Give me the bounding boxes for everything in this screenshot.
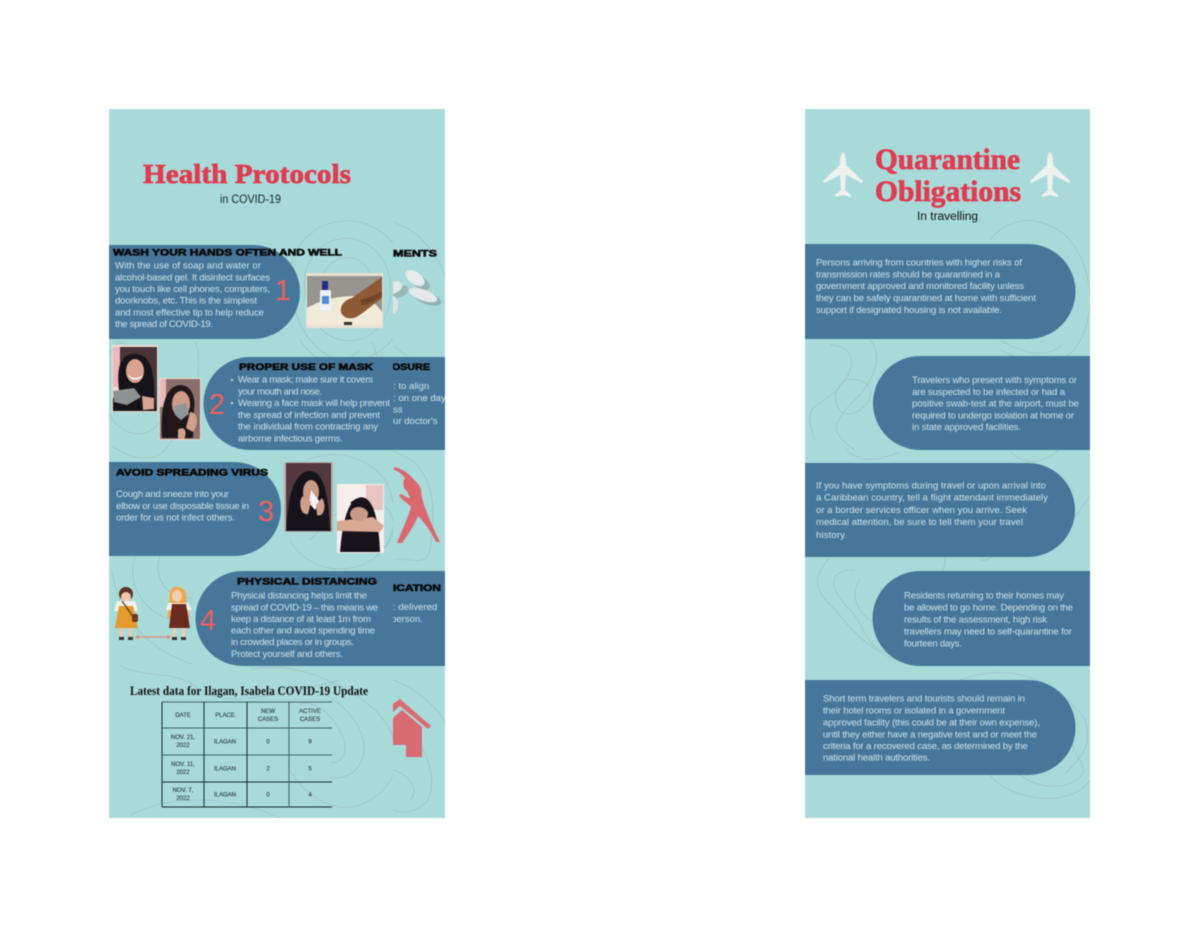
- panel: countries with higher risk: transmission rates should be quarantined in a: [816, 269, 1001, 280]
- panel: short term travelers: until they either have a negative test and or meet the: [823, 730, 1037, 740]
- panel: countries with higher risk: government approved and monitored facility unless: [816, 281, 1024, 292]
- table: COVID-19 cases: [162, 702, 332, 807]
- table: COVID-19 cases: ILAGAN: [214, 740, 236, 746]
- text: distancing body: spread of COVID-19 – this means we: [231, 602, 378, 613]
- table: COVID-19 cases: NOV. 7,: [173, 788, 194, 794]
- panel: travelers with symptoms: Travelers who present with symptoms or: [912, 375, 1078, 386]
- panel: symptoms during travel: a Caribbean country, tell a flight attendant immediately: [816, 492, 1048, 504]
- table: COVID-19 cases: 9: [308, 740, 312, 746]
- panel: symptoms during travel: history.: [816, 530, 847, 541]
- text: mask body: Wear a mask; make sure it covers: [238, 374, 373, 386]
- panel: travelers with symptoms: positive swab-test at the airport, must be: [912, 398, 1079, 410]
- heading: latest data: Latest data for Ilagan, Isabela COVID-19 Update: [130, 684, 368, 698]
- text: virus body: order for us not infect others.: [116, 512, 235, 524]
- text: exposure fragment: [393, 381, 446, 427]
- panel: residents returning: [872, 571, 1090, 666]
- photo: girl wearing mask: [159, 378, 201, 440]
- icon: house: [393, 699, 431, 757]
- subtitle: in travelling: In travelling: [917, 211, 978, 223]
- table: COVID-19 cases: CASES: [300, 717, 320, 723]
- table: COVID-19 cases: 5: [308, 766, 312, 772]
- panel: countries with higher risk: support if designated housing is not available.: [816, 305, 1002, 316]
- text: virus body: Cough and sneeze into your: [116, 489, 230, 500]
- panel: short term travelers: criteria for a recovered case, as determined by the: [823, 741, 1028, 752]
- panel: residents returning: be allowed to go home. Depending on the: [904, 602, 1073, 614]
- text: communication fragment: [392, 603, 438, 623]
- icon: child in dark dress: [166, 587, 192, 640]
- panel: short term travelers: Short term travelers and tourists should remain in: [823, 694, 1025, 705]
- text: mask body: the individual from contracting any: [238, 422, 378, 432]
- icon: pills: [392, 270, 442, 314]
- heading: wash hands: WASH YOUR HANDS OFTEN AND WELL: [113, 248, 342, 258]
- panel: residents returning: Residents returning to their homes may: [904, 591, 1064, 602]
- text: exposure fragment: : on one day: [393, 393, 446, 404]
- table: COVID-19 cases: 4: [308, 792, 312, 798]
- panel: travelers with symptoms: required to undergo isolation at home or: [912, 410, 1075, 422]
- photo: hand washing: [306, 273, 383, 328]
- icon: child with satchel: [114, 587, 138, 640]
- text: exposure fragment: : to align: [393, 381, 429, 392]
- heading: treatments fragment: MENTS: [393, 248, 437, 260]
- panel: travelers with symptoms: are suspected to be infected or had a: [912, 387, 1066, 398]
- photo: girl sneezing into elbow: [337, 484, 384, 553]
- panel: quarantine obligations: [805, 109, 1095, 818]
- text: communication fragment: : delivered: [393, 602, 437, 613]
- heading: proper use of mask: PROPER USE OF MASK: [239, 362, 373, 373]
- panel: residents returning: results of the assessment, high risk: [904, 615, 1047, 626]
- heading: physical distancing: PHYSICAL DISTANCING: [237, 576, 377, 588]
- table: COVID-19 cases: NEW: [261, 709, 275, 715]
- panel: travelers with symptoms: in state approved facilities.: [912, 422, 1021, 433]
- panel: countries with higher risk: [805, 244, 1076, 339]
- text: mask body: Wearing a face mask will help prevent: [238, 398, 390, 409]
- table: COVID-19 cases: CASES: [258, 717, 278, 723]
- number 4: 4: [200, 605, 216, 637]
- table: COVID-19 cases: 2022: [176, 796, 190, 802]
- panel: short term travelers: national health authorities.: [823, 752, 930, 764]
- panel: avoid spreading virus: [109, 462, 281, 556]
- heading: communication fragment: ICATION: [393, 583, 441, 594]
- arrow: distance between children: [136, 635, 170, 639]
- text: wash hands body: the spread of COVID-19.: [115, 319, 213, 330]
- table: COVID-19 cases: 2022: [176, 743, 190, 749]
- table: COVID-19 cases: DATE: [175, 713, 191, 719]
- panel: short term travelers: [805, 680, 1076, 775]
- panel: travelers with symptoms: [873, 356, 1090, 450]
- panel: symptoms during travel: or a border services officer when you arrive. Seek: [816, 505, 1027, 516]
- text: wash hands body: and most effective tip to help reduce: [115, 307, 264, 318]
- number 1: 1: [275, 275, 291, 307]
- table: COVID-19 cases: 0: [266, 740, 270, 746]
- text: virus body: [116, 489, 249, 524]
- panel: physical distancing: [196, 571, 445, 666]
- text: distancing body: in crowded places or in groups.: [231, 637, 354, 648]
- photo: girl sneezing into tissue: [284, 462, 333, 532]
- text: wash hands body: [115, 260, 270, 330]
- text: distancing body: Physical distancing helps limit the: [231, 590, 367, 602]
- table: COVID-19 cases: PLACE: [215, 713, 235, 719]
- heading: exposure fragment: OSURE: [392, 362, 430, 373]
- title: Quarantine Obligations: [875, 143, 1021, 208]
- title: Quarantine Obligations: Quarantine: [875, 143, 1020, 176]
- panel: symptoms during travel: If you have symptoms during travel or upon arrival into: [816, 481, 1046, 492]
- panel: symptoms during travel: medical attention, be sure to tell them your travel: [816, 517, 1023, 528]
- text: distancing body: each other and avoid spending time: [231, 626, 375, 636]
- panel: health protocols: [100, 109, 460, 818]
- table: COVID-19 cases: ILAGAN: [214, 792, 236, 798]
- panel: symptoms during travel: [805, 463, 1075, 557]
- icon: stretching figure: [394, 467, 440, 543]
- title: Health Protocols: Health Protocols: [143, 159, 351, 189]
- table: COVID-19 cases: NOV. 21,: [171, 735, 195, 741]
- text: distancing body: keep a distance of at least 1m from: [231, 614, 371, 625]
- illustration: two children keeping distance: [114, 587, 192, 640]
- panel: residents returning: travellers may need to self-quarantine for: [904, 627, 1073, 638]
- photo: girl holding mask: [112, 345, 158, 412]
- title: Quarantine Obligations: Obligations: [875, 175, 1021, 208]
- panel: residents returning: fourteen days.: [904, 639, 962, 650]
- text: exposure fragment: ss: [393, 404, 403, 415]
- panel: short term travelers: their hotel rooms or isolated in a government: [823, 706, 1005, 716]
- table: COVID-19 cases: 2: [266, 766, 270, 772]
- number 3: 3: [258, 496, 274, 528]
- panel: short term travelers: approved facility (this could be at their own expense),: [823, 718, 1040, 728]
- text: virus body: elbow or use disposable tissue in: [116, 501, 249, 512]
- text: communication fragment: person.: [391, 614, 423, 625]
- table: COVID-19 cases: NOV. 11,: [171, 762, 195, 768]
- text: wash hands body: doorknobs, etc. This is the simplest: [115, 296, 257, 307]
- panel: proper use of mask: [204, 357, 446, 450]
- text: exposure fragment: ur doctor's: [393, 416, 438, 427]
- subtitle: in COVID-19: in COVID-19: [220, 194, 281, 206]
- text: distancing body: [231, 590, 378, 660]
- heading: avoid spreading virus: AVOID SPREADING VIRUS: [116, 468, 268, 478]
- text: mask body: [231, 374, 390, 444]
- text: mask body: your mouth and nose.: [238, 386, 322, 397]
- icon: right airplane: [1030, 152, 1070, 197]
- text: mask body: airborne infectious germs.: [238, 434, 343, 444]
- icon: left airplane: [823, 152, 863, 197]
- table: COVID-19 cases: ILAGAN: [214, 766, 236, 772]
- panel: wash your hands: [109, 245, 342, 339]
- text: wash hands body: alcohol-based gel. It disinfect surfaces: [115, 272, 270, 283]
- table: COVID-19 cases: 2022: [176, 770, 190, 776]
- text: mask body: the spread of infection and prevent: [238, 410, 380, 421]
- panel: countries with higher risk: Persons arriving from countries with higher risks of: [816, 258, 1022, 268]
- table: COVID-19 cases: ACTIVE: [299, 709, 321, 715]
- text: wash hands body: With the use of soap and water or: [115, 260, 262, 272]
- number 2: 2: [209, 389, 225, 421]
- panel: countries with higher risk: they can be safely quarantined at home with sufficient: [816, 293, 1036, 304]
- table: COVID-19 cases: 0: [266, 792, 270, 798]
- text: wash hands body: you touch like cell phones, computers,: [115, 284, 270, 295]
- text: distancing body: Protect yourself and others.: [231, 649, 343, 660]
